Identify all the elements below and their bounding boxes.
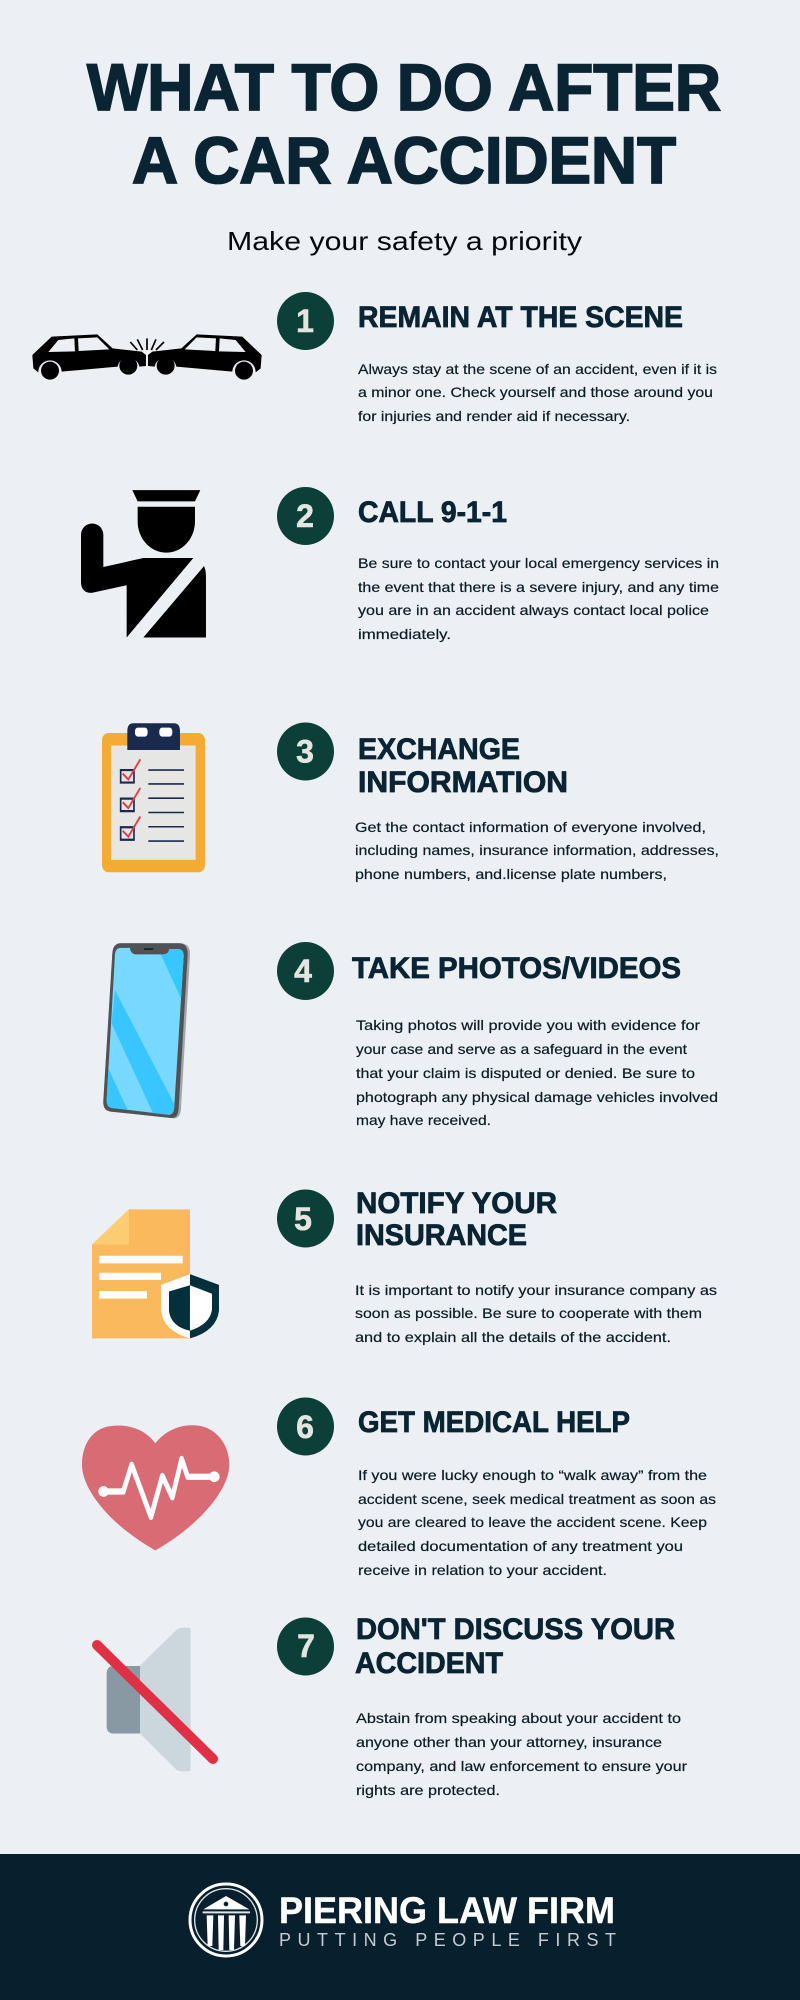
body text 6: detailed documentation of any treatment you bbox=[358, 1538, 683, 1554]
icon: muted speaker bbox=[97, 1628, 213, 1771]
body text 7: rights are protected. bbox=[356, 1782, 500, 1798]
number badge 5: 5 bbox=[294, 1201, 312, 1237]
panel: step 6 get medical help bbox=[82, 1398, 716, 1578]
body text 6 bbox=[358, 1467, 716, 1578]
body text 4: Taking photos will provide you with evidence for bbox=[356, 1017, 700, 1033]
icon: insurance document with shield bbox=[92, 1209, 219, 1338]
panel: step 4 take photos bbox=[100, 941, 718, 1128]
heading 2: CALL 9-1-1 bbox=[358, 496, 507, 529]
panel: step 5 notify your insurance bbox=[92, 1187, 717, 1345]
body text 2: Be sure to contact your local emergency services in bbox=[358, 555, 719, 571]
icon: clipboard checklist bbox=[102, 723, 205, 872]
firm name: PIERING LAW FIRM bbox=[279, 1889, 615, 1931]
number badge 1: 1 bbox=[296, 303, 314, 339]
title bbox=[87, 50, 721, 197]
number badge 7 bbox=[277, 1618, 334, 1676]
icon: police officer bbox=[81, 490, 206, 637]
subtitle: Make your safety a priority bbox=[227, 226, 582, 256]
number badge 2 bbox=[277, 487, 334, 545]
body text 4: that your claim is disputed or denied. Be sure to bbox=[356, 1065, 695, 1081]
body text 4: photograph any physical damage vehicles involved bbox=[356, 1089, 718, 1105]
body text 6: If you were lucky enough to “walk away” from the bbox=[358, 1467, 707, 1483]
body text 5: and to explain all the details of the accident. bbox=[355, 1329, 671, 1345]
title: A CAR ACCIDENT bbox=[132, 123, 676, 197]
body text 6: you are cleared to leave the accident scene. Keep bbox=[358, 1514, 707, 1530]
number badge 6: 6 bbox=[296, 1409, 314, 1445]
number badge 2: 2 bbox=[296, 498, 314, 534]
icon: two cars colliding bbox=[32, 334, 262, 380]
heading 1: REMAIN AT THE SCENE bbox=[358, 301, 683, 334]
body text 1: Always stay at the scene of an accident, even if it is bbox=[358, 361, 717, 377]
heading 7: ACCIDENT bbox=[355, 1647, 503, 1680]
icon: smartphone bbox=[100, 941, 193, 1120]
body text 3: Get the contact information of everyone involved, bbox=[355, 819, 706, 835]
body text 5 bbox=[355, 1282, 717, 1345]
body text 3: phone numbers, and.license plate numbers, bbox=[355, 866, 667, 882]
tagline: PUTTING PEOPLE FIRST bbox=[279, 1930, 616, 1950]
body text 4: your case and serve as a safeguard in the event bbox=[356, 1041, 687, 1057]
number badge 1 bbox=[277, 292, 334, 350]
icon: heart with pulse line bbox=[82, 1425, 229, 1550]
heading 3: INFORMATION bbox=[358, 766, 568, 799]
panel: step 2 call 9-1-1 bbox=[81, 487, 719, 642]
body text 2: immediately. bbox=[358, 626, 451, 642]
heading 5: INSURANCE bbox=[356, 1219, 527, 1252]
body text 7 bbox=[356, 1710, 687, 1798]
panel: step 3 exchange information bbox=[102, 722, 719, 882]
body text 2: the event that there is a severe injury, and any time bbox=[358, 579, 719, 595]
heading 7 bbox=[355, 1613, 675, 1680]
body text 6: accident scene, seek medical treatment as soon as bbox=[358, 1491, 716, 1507]
body text 7: Abstain from speaking about your accident to bbox=[356, 1710, 681, 1726]
body text 2 bbox=[358, 555, 719, 642]
body text 3: including names, insurance information, addresses, bbox=[355, 842, 719, 858]
number badge 3 bbox=[277, 722, 334, 780]
body text 5: It is important to notify your insurance company as bbox=[355, 1282, 717, 1298]
body text 6: receive in relation to your accident. bbox=[358, 1562, 607, 1578]
body text 3 bbox=[355, 819, 719, 882]
number badge 5 bbox=[277, 1190, 334, 1248]
heading 6: GET MEDICAL HELP bbox=[358, 1406, 630, 1439]
title: WHAT TO DO AFTER bbox=[87, 50, 721, 124]
number badge 3: 3 bbox=[296, 734, 314, 770]
number badge 4: 4 bbox=[294, 953, 312, 989]
heading 7: DON'T DISCUSS YOUR bbox=[356, 1613, 675, 1646]
panel: step 1 remain at the scene bbox=[32, 292, 717, 424]
number badge 7: 7 bbox=[297, 1628, 315, 1664]
heading 4: TAKE PHOTOS/VIDEOS bbox=[352, 952, 681, 985]
heading 3: EXCHANGE bbox=[358, 733, 520, 766]
body text 1 bbox=[358, 361, 717, 424]
body text 4: may have received. bbox=[356, 1112, 491, 1128]
body text 1: for injuries and render aid if necessary. bbox=[358, 408, 630, 424]
body text 4 bbox=[356, 1017, 718, 1128]
body text 7: anyone other than your attorney, insurance bbox=[356, 1734, 662, 1750]
heading 3 bbox=[358, 733, 568, 799]
body text 7: company, and law enforcement to ensure your bbox=[356, 1758, 687, 1774]
body text 5: soon as possible. Be sure to cooperate with them bbox=[355, 1305, 702, 1321]
heading 5: NOTIFY YOUR bbox=[356, 1187, 557, 1220]
logo: courthouse in circle bbox=[190, 1884, 262, 1956]
panel: step 7 don't discuss your accident bbox=[97, 1613, 687, 1798]
heading 5 bbox=[356, 1187, 557, 1252]
number badge 6 bbox=[277, 1398, 334, 1456]
body text 2: you are in an accident always contact local police bbox=[358, 602, 709, 618]
body text 1: a minor one. Check yourself and those around you bbox=[358, 384, 713, 400]
number badge 4 bbox=[277, 942, 334, 1000]
footer band bbox=[0, 1854, 800, 2000]
